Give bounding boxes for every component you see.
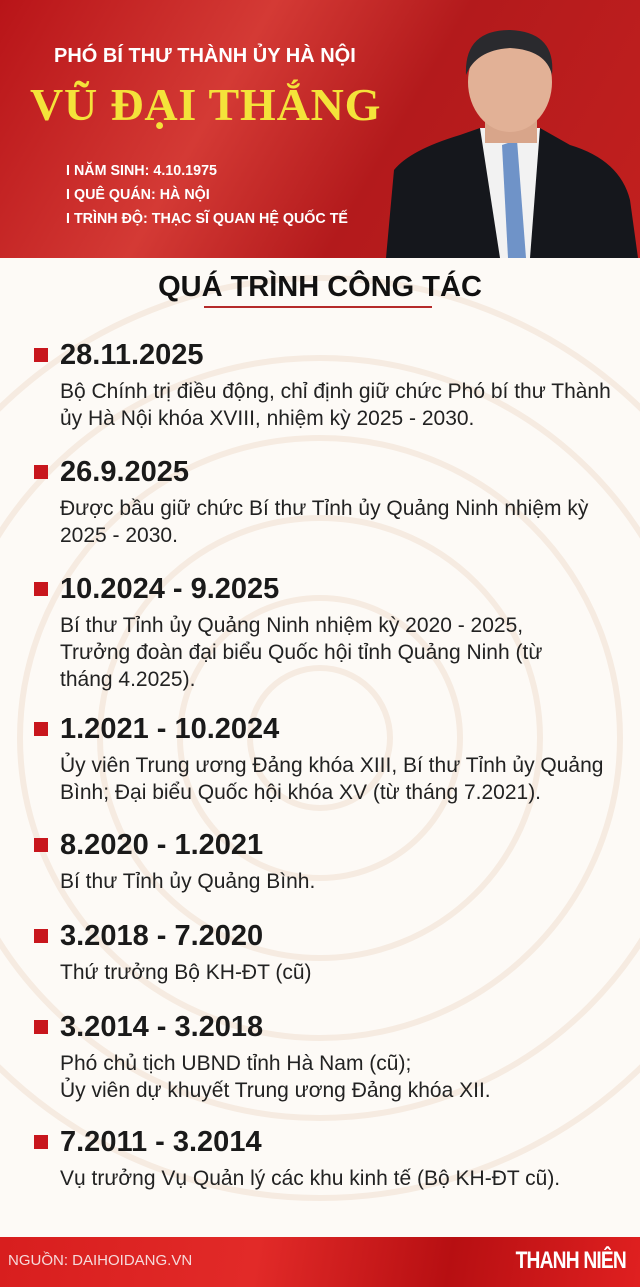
entry 3: tháng 4.2025). <box>60 668 195 691</box>
entry 7: Ủy viên dự khuyết Trung ương Đảng khóa XII. <box>60 1079 491 1102</box>
entry 4: Ủy viên Trung ương Đảng khóa XIII, Bí thư Tỉnh ủy Quảng Bình; Đại biểu Quốc hội khóa XV (từ tháng 7.2021). <box>60 754 603 804</box>
entry 6: Thứ trưởng Bộ KH-ĐT (cũ) <box>60 961 312 984</box>
entry 7: Phó chủ tịch UBND tỉnh Hà Nam (cũ); <box>60 1052 411 1075</box>
personal info: I TRÌNH ĐỘ: THẠC SĨ QUAN HỆ QUỐC TẾ <box>66 211 348 227</box>
logo: THANH NIÊN <box>516 1247 626 1274</box>
entry 2: Được bầu giữ chức Bí thư Tỉnh ủy Quảng Ninh nhiệm kỳ 2025 - 2030. <box>60 497 588 547</box>
entry 6: 3.2018 - 7.2020 <box>60 920 263 952</box>
entry 3: Trưởng đoàn đại biểu Quốc hội tỉnh Quảng Ninh (từ <box>60 641 542 664</box>
entry 1 <box>34 339 611 430</box>
footer <box>0 1237 640 1287</box>
section heading: QUÁ TRÌNH CÔNG TÁC <box>158 271 482 303</box>
entry 3: Bí thư Tỉnh ủy Quảng Ninh nhiệm kỳ 2020 - 2025, <box>60 614 523 637</box>
background pattern <box>0 275 640 1201</box>
entry 8: 7.2011 - 3.2014 <box>60 1126 262 1158</box>
entry 3 <box>34 573 542 691</box>
entry 6 <box>34 920 312 984</box>
entry 5: 8.2020 - 1.2021 <box>60 829 263 861</box>
personal info <box>66 162 348 227</box>
entry 3: 10.2024 - 9.2025 <box>60 573 279 605</box>
portrait photo <box>386 30 638 258</box>
entry 5 <box>34 829 315 893</box>
header banner <box>0 0 640 258</box>
entry 8: Vụ trưởng Vụ Quản lý các khu kinh tế (Bộ KH-ĐT cũ). <box>60 1167 560 1190</box>
entry 8 <box>34 1126 560 1190</box>
entry 1: Bộ Chính trị điều động, chỉ định giữ chức Phó bí thư Thành ủy Hà Nội khóa XVIII, nhiệm kỳ 2025 - 2030. <box>60 380 611 430</box>
entry 1: 28.11.2025 <box>60 339 204 371</box>
entry 2: 26.9.2025 <box>60 456 189 488</box>
entry 7: 3.2014 - 3.2018 <box>60 1011 263 1043</box>
personal info: I QUÊ QUÁN: HÀ NỘI <box>66 187 210 203</box>
entry 4 <box>34 713 603 804</box>
entry 7 <box>34 1011 491 1102</box>
entry 4: 1.2021 - 10.2024 <box>60 713 279 745</box>
entry 5: Bí thư Tỉnh ủy Quảng Bình. <box>60 870 315 893</box>
entry 2 <box>34 456 588 547</box>
source: NGUỒN: DAIHOIDANG.VN <box>8 1252 192 1269</box>
name title: VŨ ĐẠI THẮNG <box>30 79 381 130</box>
subtitle: PHÓ BÍ THƯ THÀNH ỦY HÀ NỘI <box>54 45 356 67</box>
personal info: I NĂM SINH: 4.10.1975 <box>66 163 217 179</box>
